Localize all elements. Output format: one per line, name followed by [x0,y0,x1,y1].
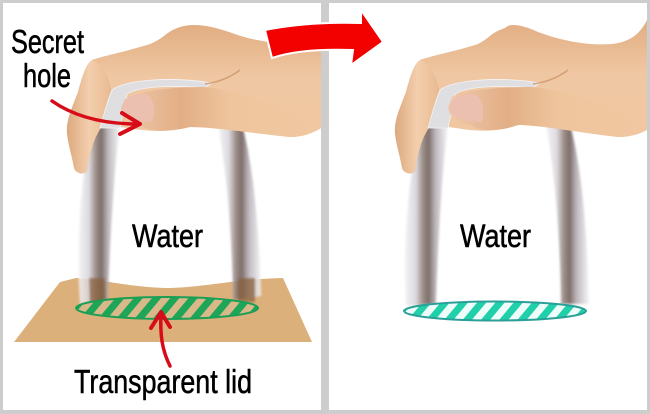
label: Secret hole: Secret [11,23,84,60]
label: Secret hole [11,23,84,94]
arrow: red pointer to secret hole [52,101,140,134]
glass: left step [78,125,261,304]
panel: right [329,3,647,410]
glass: rim under fingers right [428,79,540,128]
cardboard sheet [14,278,312,342]
thumbnail right [449,95,483,122]
lid: green striped ellipse [76,297,258,319]
hand: left step [67,25,321,173]
panel: left [3,3,321,410]
lid: teal striped ellipse [404,302,586,320]
hand: right step [395,20,647,173]
thumb right [448,87,647,137]
arrow: big red between steps [265,10,383,65]
label: Transparent lid: Transparent lid [74,363,252,400]
label: Water left: Water [132,218,203,254]
label: Water right: Water [460,218,531,254]
arrow: red pointer to lid [151,312,170,366]
thumb [121,87,321,137]
glass: rim under fingers [100,79,212,128]
label: Secret hole: hole [23,57,71,94]
glass: right step [405,125,589,306]
thumbnail [121,94,154,122]
